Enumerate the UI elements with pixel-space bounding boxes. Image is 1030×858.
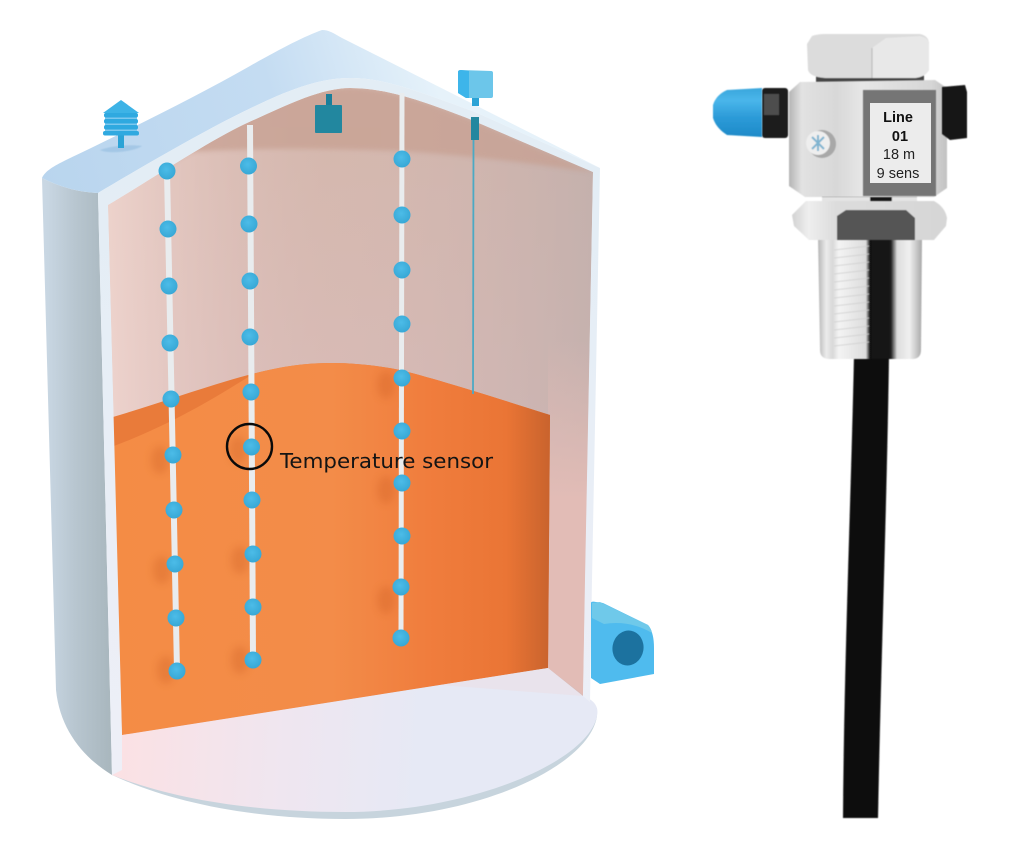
- top hex nut: [807, 34, 929, 83]
- level probe: [458, 70, 493, 394]
- roof outer surface: [42, 30, 600, 193]
- grain pile top band: [113, 363, 550, 735]
- outlet box: [591, 602, 654, 684]
- roof vent: [100, 100, 142, 152]
- threaded barrel: [818, 236, 922, 359]
- silo cutaway illustration: [42, 30, 654, 819]
- callout ring: [227, 424, 272, 469]
- label: [870, 103, 931, 183]
- interior shading: [100, 85, 600, 700]
- back wall interior: [108, 88, 593, 740]
- callout label: Temperature sensor: [279, 449, 494, 473]
- lower hex nut: [792, 201, 947, 240]
- sensor head product photo: [713, 34, 967, 818]
- black cable: [843, 355, 889, 818]
- front cut edge: [98, 78, 600, 775]
- blue cable gland: [713, 88, 762, 137]
- left outer wall: [42, 178, 112, 775]
- ceiling sensor box: [315, 94, 342, 133]
- sensor cable: line 3: [392, 93, 410, 646]
- right black plug: [942, 85, 967, 140]
- sensor cable: line 2: [240, 125, 262, 668]
- cable gland nut: [762, 88, 788, 138]
- collar: [822, 195, 917, 209]
- label: 18 m: [883, 147, 915, 163]
- right inner side wall: [548, 390, 588, 694]
- label: Line: [883, 110, 913, 126]
- sensor shadows on grain: [151, 371, 395, 684]
- label plate recess: [863, 90, 936, 196]
- sensor cable: line 1: [158, 162, 186, 680]
- floor corner tint: [440, 668, 583, 696]
- body block: [789, 80, 947, 197]
- callout: temperature sensor: [227, 424, 494, 473]
- grain pile front: [114, 363, 550, 735]
- floor rim shadow: [112, 708, 597, 819]
- floor: [112, 668, 597, 812]
- label: 01: [892, 129, 908, 145]
- side screw: [806, 130, 836, 158]
- label: 9 sens: [877, 166, 919, 182]
